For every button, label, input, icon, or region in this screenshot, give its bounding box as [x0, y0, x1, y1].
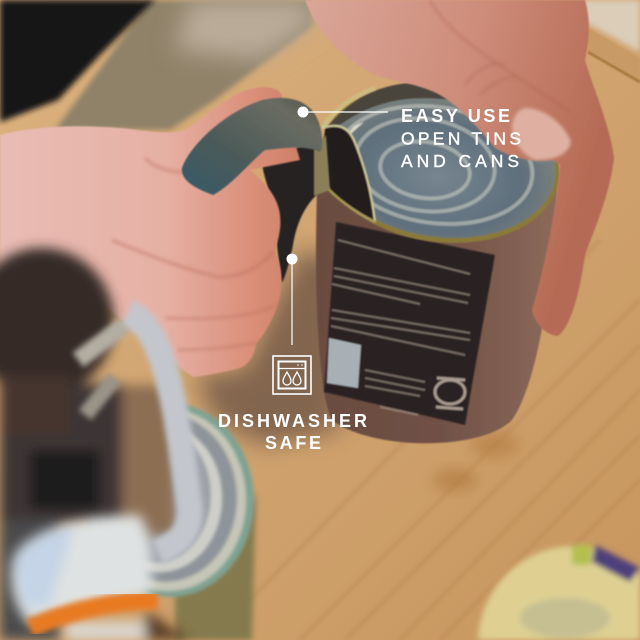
can [310, 68, 570, 443]
blurred foreground device [0, 248, 190, 640]
can lid flap [322, 126, 376, 222]
right hand [305, 0, 614, 336]
device cap [11, 515, 190, 640]
dark area top left [0, 0, 155, 122]
can rim and lid [321, 82, 560, 244]
blurred jar bottom right [478, 545, 640, 640]
opener upper handle [182, 98, 322, 195]
callout text: dishwasher safe: DISHWASHER [218, 411, 367, 431]
thumb creases [430, 1, 518, 78]
shadow area below hand [195, 250, 340, 445]
device body [0, 248, 175, 640]
callout text: easy use: OPEN TINS [401, 128, 521, 148]
can label [324, 222, 495, 425]
callout pointer dot and line [286, 254, 298, 345]
foreground can body [175, 490, 256, 640]
callout pointer dot and line [298, 106, 388, 118]
callout text: dishwasher safe [218, 411, 367, 453]
device strap [78, 312, 190, 552]
device orange band [30, 600, 158, 628]
finger creases [112, 158, 277, 350]
callout text: easy use: EASY USE [401, 106, 510, 126]
can body [316, 165, 558, 443]
opener metal joint [314, 135, 330, 196]
callout: dishwasher safe [218, 254, 367, 453]
callout text: dishwasher safe: SAFE [265, 433, 321, 453]
foreground can lid [141, 404, 256, 599]
opener lower handle [262, 140, 322, 283]
callout text: easy use [401, 106, 521, 171]
thumbnail [512, 108, 571, 160]
icon: dishwasher [273, 356, 311, 394]
callout: easy use [298, 106, 521, 171]
callout text: easy use: AND CANS [401, 151, 519, 171]
left hand [0, 87, 300, 377]
blurred foreground can [141, 404, 259, 640]
